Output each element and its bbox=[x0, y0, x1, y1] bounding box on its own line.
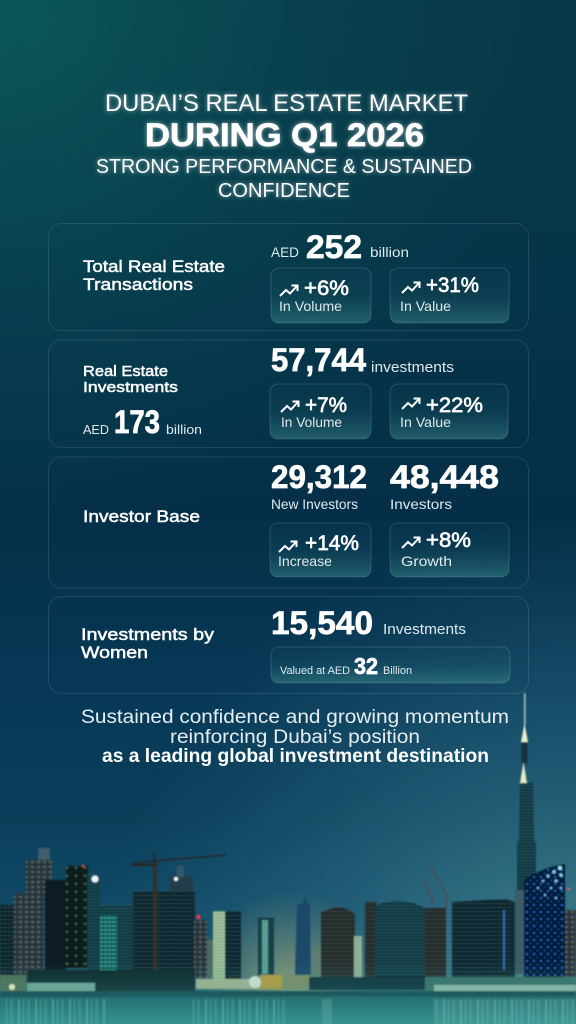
stat card: valued at AED 32 billion: Valued at AED bbox=[280, 665, 350, 677]
icon: trend up bbox=[402, 538, 420, 548]
icon: trend up bbox=[402, 398, 420, 409]
stat card: valued at AED 32 billion: 32 bbox=[354, 653, 378, 679]
stat card: +31% in value: In Value bbox=[400, 298, 451, 314]
figure: 15,540 investments: 15,540 bbox=[271, 605, 373, 641]
figure: AED 252 billion bbox=[271, 229, 409, 265]
figure: 48,448 investors bbox=[390, 459, 499, 512]
figure: AED 173 billion: billion bbox=[166, 422, 202, 437]
closing statement: as a leading global investment destination bbox=[102, 746, 489, 767]
figure: 29,312 new investors: 29,312 bbox=[271, 459, 367, 495]
figure: 29,312 new investors bbox=[271, 459, 367, 512]
heading: real estate investments bbox=[83, 363, 178, 396]
closing statement: Sustained confidence and growing momentum bbox=[81, 707, 509, 728]
title bbox=[96, 90, 472, 202]
skyline photo illustration bbox=[0, 693, 576, 1024]
panel: investor base bbox=[48, 457, 528, 588]
waterfront podiums bbox=[0, 970, 576, 997]
icon: trend up bbox=[279, 542, 296, 552]
stat card: valued at AED 32 billion bbox=[271, 647, 510, 683]
stat card: +8% growth: +8% bbox=[426, 529, 471, 552]
far right tower bbox=[565, 888, 576, 980]
left towers cluster bbox=[0, 848, 133, 977]
stat card: +22% in value: +22% bbox=[426, 394, 483, 417]
figure: 29,312 new investors: New Investors bbox=[271, 496, 358, 512]
title: DUBAI’S REAL ESTATE MARKET bbox=[105, 90, 468, 117]
heading: total real estate transactions: Total Real Estate bbox=[83, 257, 225, 276]
title: DURING Q1 2026 bbox=[145, 117, 424, 153]
stat card: +8% growth: Growth bbox=[401, 553, 452, 569]
figure: 15,540 investments bbox=[271, 605, 466, 641]
icon: trend up bbox=[280, 286, 298, 296]
figure: AED 173 billion: AED bbox=[83, 422, 109, 437]
heading: real estate investments: Real Estate bbox=[83, 363, 168, 380]
right towers bbox=[295, 866, 515, 977]
figure: 57,744 investments: investments bbox=[371, 359, 454, 376]
central tower with crane bbox=[132, 852, 226, 973]
stat card: +6% in volume: In Volume bbox=[279, 298, 342, 314]
water reflections bbox=[0, 997, 576, 1024]
stat card: +7% in volume bbox=[270, 384, 371, 439]
stat card: +22% in value: In Value bbox=[400, 414, 451, 430]
figure: AED 173 billion: 173 bbox=[114, 404, 160, 440]
figure: 48,448 investors: 48,448 bbox=[390, 459, 499, 495]
stat card: valued at AED 32 billion: Billion bbox=[383, 665, 412, 677]
stat card: +14% increase bbox=[270, 523, 371, 577]
closing statement bbox=[81, 707, 509, 767]
closing statement: reinforcing Dubai’s position bbox=[170, 727, 420, 748]
heading: investments by women bbox=[81, 625, 215, 662]
stat card: +8% growth bbox=[390, 523, 509, 577]
stat card: +14% increase: +14% bbox=[305, 532, 359, 555]
heading: real estate investments: Investments bbox=[83, 379, 178, 396]
icon: trend up bbox=[281, 402, 298, 412]
figure: 48,448 investors: Investors bbox=[390, 496, 452, 512]
stat card: +14% increase: Increase bbox=[278, 553, 332, 569]
title: CONFIDENCE bbox=[218, 180, 350, 202]
heading: investments by women: Women bbox=[81, 643, 148, 662]
stat card: +7% in volume: +7% bbox=[305, 394, 347, 417]
stat card: +7% in volume: In Volume bbox=[281, 414, 342, 430]
title: DUBAI’S REAL ESTATE MARKET bbox=[105, 90, 468, 117]
burj khalifa tower bbox=[515, 693, 536, 974]
title: STRONG PERFORMANCE & SUSTAINED bbox=[96, 156, 472, 178]
figure: AED 173 billion bbox=[83, 404, 202, 440]
heading: investments by women: Investments by bbox=[81, 625, 215, 644]
title: CONFIDENCE bbox=[218, 180, 350, 202]
stat card: +31% in value: +31% bbox=[426, 274, 479, 297]
blue curved tower bbox=[524, 864, 565, 977]
panel: investments by women bbox=[48, 596, 528, 694]
mid towers bbox=[194, 911, 274, 980]
title: STRONG PERFORMANCE & SUSTAINED bbox=[96, 156, 472, 178]
figure: 15,540 investments: Investments bbox=[383, 621, 466, 638]
panel: real estate investments bbox=[48, 340, 528, 448]
stat card: +22% in value bbox=[390, 384, 508, 439]
heading: total real estate transactions: Transactions bbox=[83, 275, 193, 294]
figure: AED 252 billion: AED bbox=[271, 244, 299, 260]
figure: AED 252 billion: billion bbox=[370, 244, 409, 260]
figure: 57,744 investments bbox=[271, 342, 454, 378]
figure: AED 252 billion: 252 bbox=[306, 229, 362, 265]
stat card: +31% in value bbox=[390, 268, 509, 323]
heading: total real estate transactions bbox=[83, 257, 225, 294]
title: DURING Q1 2026 bbox=[145, 117, 424, 153]
icon: trend up bbox=[402, 282, 420, 293]
heading: investor base: Investor Base bbox=[83, 507, 200, 526]
panel: total real estate transactions bbox=[48, 224, 528, 330]
stat card: +6% in volume: +6% bbox=[304, 277, 349, 300]
stat card: +6% in volume bbox=[271, 268, 371, 323]
figure: 57,744 investments: 57,744 bbox=[271, 342, 366, 378]
